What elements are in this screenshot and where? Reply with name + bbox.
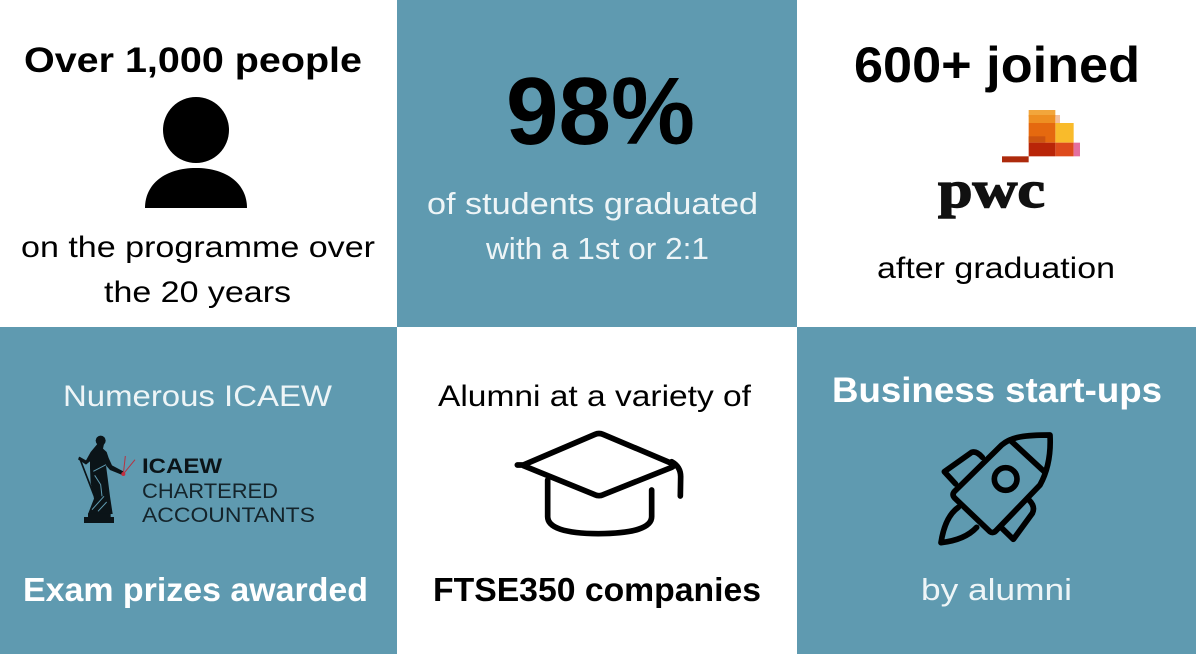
- panel: FTSE350 alumni: [397, 327, 797, 654]
- statistic: 98%: 98%: [506, 58, 695, 165]
- logo: ICAEW Chartered Accountants: ICAEW: [142, 455, 222, 478]
- heading: Business start-ups: Business start-ups: [832, 371, 1162, 410]
- text: after graduation: after graduation: [877, 252, 1115, 285]
- heading: Exam prizes awarded: Exam prizes awarded: [23, 571, 368, 608]
- text: the 20 years: the 20 years: [104, 276, 291, 309]
- icon: statue figure: [78, 436, 135, 523]
- heading: FTSE350 companies: FTSE350 companies: [433, 571, 761, 608]
- text: by alumni: by alumni: [921, 572, 1072, 607]
- panel: over 1,000 people: [0, 0, 397, 327]
- logo: ICAEW Chartered Accountants: CHARTERED: [142, 479, 278, 503]
- heading: 600+ joined: 600+ joined: [854, 37, 1140, 93]
- text: Alumni at a variety of: Alumni at a variety of: [438, 380, 752, 413]
- text: with a 1st or 2:1: with a 1st or 2:1: [485, 231, 709, 266]
- logo: ICAEW Chartered Accountants: [78, 436, 315, 527]
- icon: graduation cap: [517, 433, 681, 534]
- heading: Over 1,000 people: Over 1,000 people: [24, 41, 362, 80]
- panel: ICAEW exam prizes: [0, 327, 397, 654]
- panel: business start-ups: [797, 327, 1196, 654]
- logo: PwC: pwc: [938, 162, 1045, 219]
- logo: ICAEW Chartered Accountants: ACCOUNTANTS: [142, 503, 315, 527]
- text: of students graduated: of students graduated: [427, 186, 758, 221]
- text: Numerous ICAEW: Numerous ICAEW: [63, 380, 333, 413]
- text: on the programme over: on the programme over: [21, 231, 375, 264]
- icon: rocket: [941, 435, 1050, 543]
- panel: 98% graduated: [397, 0, 797, 327]
- logo: PwC: [938, 110, 1080, 219]
- panel: 600+ joined PwC: [797, 0, 1196, 327]
- icon: person: [145, 97, 247, 208]
